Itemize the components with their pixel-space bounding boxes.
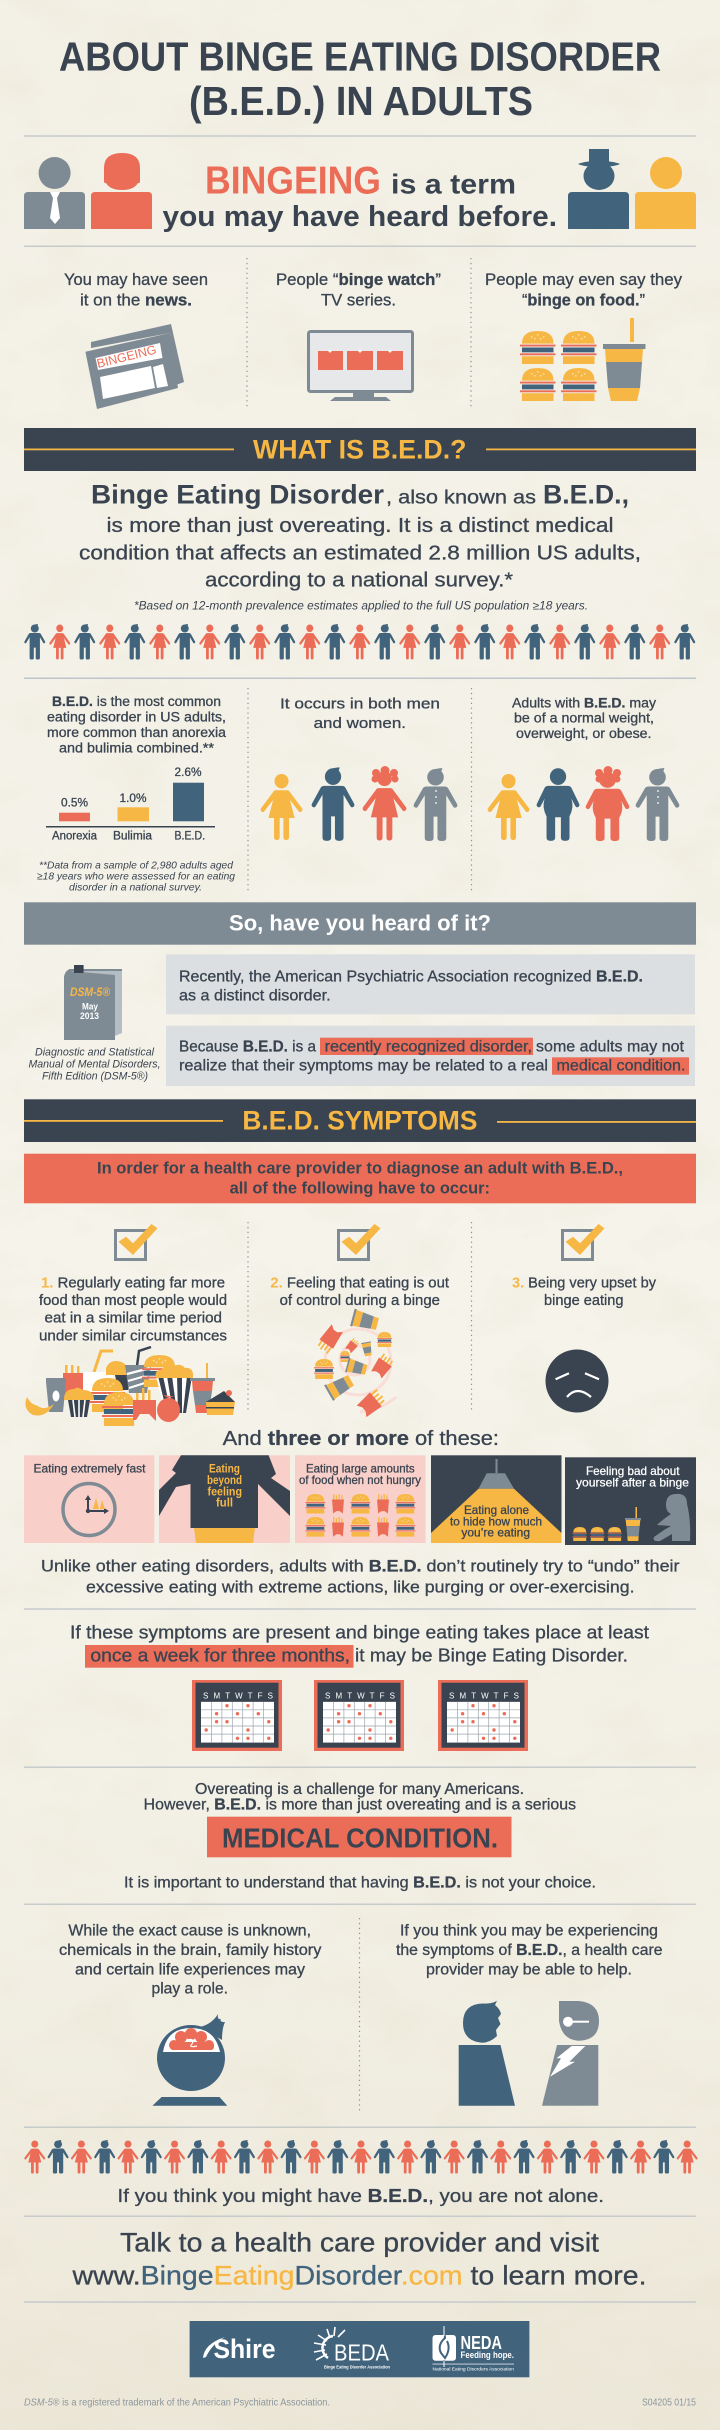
icon: DSM-5 book: 2013 <box>80 1011 99 1021</box>
panel: beyond feeling full: beyond <box>207 1473 242 1487</box>
icon: DSM-5 book: DSM-5® <box>70 985 110 999</box>
panel: eating alone <box>431 1455 562 1543</box>
banner: diagnosis criteria <box>24 1154 696 1203</box>
caption: DSM-5 <box>28 1047 160 1082</box>
bar chart: Anorexia <box>52 830 98 842</box>
panel: seek help: If you think you may be experiencing <box>400 1923 658 1940</box>
logo panel <box>190 2321 529 2377</box>
panel: news: it on the news. <box>80 291 192 310</box>
icon: sad face <box>546 1350 608 1412</box>
bar chart: 2.6% <box>174 765 202 779</box>
footnote: data sample <box>37 860 235 893</box>
panel: causes: play a role. <box>152 1981 228 1998</box>
panel: normal weight, overweight, obese: be of a normal weight, <box>514 711 654 726</box>
logo: NEDA: Feeding hope. <box>460 2350 514 2361</box>
definition text <box>79 479 641 592</box>
definition text: , also known as <box>386 487 536 508</box>
logo: BEDA: Binge Eating Disorder Association <box>324 2364 390 2370</box>
panel: criterion 1: eat in a similar time period <box>44 1311 222 1327</box>
text: medical condition <box>124 1781 596 1892</box>
panel: binge watch: TV series. <box>321 291 396 310</box>
bar chart <box>46 765 215 842</box>
icon: calendar 3: S M T W T F S <box>449 1691 519 1700</box>
text: once a week for three months: it may be Binge Eating Disorder. <box>355 1646 628 1666</box>
section heading: B.E.D. symptoms <box>24 1099 696 1142</box>
footnote: data sample: disorder in a national survey. <box>69 881 202 893</box>
panel: men and women: and women. <box>314 715 406 732</box>
icon: doctor <box>542 2001 599 2106</box>
icon: yellow person <box>635 157 696 229</box>
icon: DSM-5 book <box>64 965 122 1040</box>
icon: pile of food <box>25 1347 235 1426</box>
panel: men and women <box>261 696 457 841</box>
panel: recently recognized: some adults may not <box>536 1038 685 1055</box>
caption: DSM-5: Diagnostic and Statistical <box>35 1047 155 1059</box>
panel: criterion 3: 3. Being very upset by <box>512 1275 657 1291</box>
logo: BEDA <box>314 2327 390 2370</box>
panel: causes <box>59 1923 322 2106</box>
panel: feeling bad: Feeling bad about <box>586 1464 680 1478</box>
icon: checkbox <box>562 1224 604 1260</box>
icon: burgers and drink <box>520 318 646 401</box>
panel: beyond feeling full: Eating <box>209 1462 240 1476</box>
panel: news <box>64 270 208 409</box>
footnote: data sample: **Data from a sample of 2,980 adults aged <box>39 860 234 872</box>
definition text: B.E.D., <box>543 479 629 509</box>
panel: eating when not hungry <box>295 1455 426 1543</box>
panel: recently recognized: recently recognized disorder, <box>325 1038 532 1055</box>
panel: recently recognized: Because B.E.D. is a <box>179 1038 316 1055</box>
icon: television <box>308 332 412 401</box>
panel: causes: chemicals in the brain, family history <box>59 1942 322 1959</box>
bar chart: Bulimia <box>113 830 153 842</box>
panel: eating fast <box>24 1455 154 1543</box>
panel: feeling bad <box>565 1457 696 1545</box>
icon: sad sitting person <box>654 1494 690 1541</box>
icon: woman with hair <box>91 153 152 229</box>
title <box>59 34 661 124</box>
intro text: is a term <box>391 169 516 200</box>
panel: recognized by APA: Recently, the American Psychiatric Association recognized B.E.D. <box>179 968 643 985</box>
icon: newspaper <box>85 324 184 409</box>
text: not alone: If you think you might have B.E.D. , you are not alone. <box>118 2185 604 2206</box>
icon: calendar 2: S M T W T F S <box>325 1691 395 1700</box>
panel: binge watch: People “binge watch” <box>276 270 441 289</box>
caption: DSM-5: Fifth Edition (DSM-5®) <box>42 1070 148 1082</box>
intro text: you may have heard before. <box>162 201 557 233</box>
panel: normal weight, overweight, obese: Adults with B.E.D. may <box>512 695 656 710</box>
panel: seek help <box>396 1923 662 2106</box>
panel: binge on food: “binge on food.” <box>522 291 645 310</box>
icon: head with brain <box>152 2014 227 2106</box>
definition text: is more than just overeating. It is a distinct medical <box>106 514 614 537</box>
panel: recently recognized <box>166 1026 695 1086</box>
people row: 2.8 million adults <box>24 624 695 660</box>
icon: man with hat <box>568 149 629 229</box>
icon: burgers and fries <box>305 1494 415 1537</box>
logo: NEDA: NEDA <box>460 2333 502 2353</box>
title: ABOUT BINGE EATING DISORDER <box>59 34 661 80</box>
panel: criterion 2: of control during a binge <box>280 1293 440 1309</box>
text: once a week for three months <box>70 1623 649 1668</box>
panel: binge on food: People may even say they <box>485 270 682 289</box>
footnote: data sample: ≥18 years who were assessed for an eating <box>37 871 235 883</box>
section heading: have you heard of it: So, have you heard of it? <box>229 911 491 936</box>
section heading: have you heard of it <box>24 902 696 945</box>
intro text: BINGEING <box>205 160 381 203</box>
figures: body sizes <box>488 766 679 841</box>
heading: three or more: And three or more of these: <box>223 1428 499 1450</box>
panel: eating when not hungry: of food when not hungry <box>299 1473 421 1487</box>
panel: recently recognized: realize that their symptoms may be related to a real <box>179 1058 548 1075</box>
panel: seek help: the symptoms of B.E.D., a health care <box>396 1942 662 1959</box>
panel: beyond feeling full <box>159 1455 290 1543</box>
figures: men and women <box>261 766 457 841</box>
definition text: condition that affects an estimated 2.8 million US adults, <box>79 541 641 564</box>
panel: feeling bad: yourself after a binge <box>576 1475 689 1489</box>
panel: most common eating disorder: eating disorder in US adults, <box>47 709 226 724</box>
panel: eating alone: Eating alone <box>464 1503 529 1517</box>
bar chart: 0.5% <box>61 796 88 810</box>
panel: binge on food <box>485 270 682 401</box>
call to action: www.BingeEatingDisorder.com to learn more. <box>71 2260 646 2290</box>
panel: causes: While the exact cause is unknown, <box>68 1923 311 1940</box>
icon: calendar 3 <box>438 1680 528 1751</box>
intro banner: bingeing is a term <box>24 149 696 233</box>
text: no purging <box>41 1558 680 1596</box>
panel: criterion 3: binge eating <box>544 1293 624 1309</box>
panel: criterion 2 <box>270 1224 449 1418</box>
panel: criterion 2: 2. Feeling that eating is out <box>270 1275 449 1291</box>
logo: Shire: Shire <box>214 2334 276 2364</box>
caption: DSM-5: Manual of Mental Disorders, <box>28 1059 160 1071</box>
panel: criterion 1: under similar circumstances <box>39 1329 227 1345</box>
section heading: B.E.D. symptoms: B.E.D. SYMPTOMS <box>242 1105 477 1135</box>
footer note: S04205 01/15 <box>642 2396 696 2408</box>
panel: recently recognized: medical condition. <box>556 1058 686 1075</box>
panel: seek help: provider may be able to help. <box>426 1961 632 1978</box>
panel: beyond feeling full: feeling <box>208 1484 242 1498</box>
text: medical condition: MEDICAL CONDITION. <box>222 1822 498 1853</box>
panel: eating alone: you’re eating <box>461 1526 530 1540</box>
icon: patient <box>459 2001 515 2106</box>
panel: criterion 1: food than most people would <box>39 1293 227 1309</box>
call to action <box>71 2228 646 2290</box>
icon: checkbox <box>116 1224 158 1260</box>
banner: diagnosis criteria: all of the following have to occur: <box>230 1179 490 1198</box>
panel: recognized by APA <box>166 954 695 1014</box>
logo: BEDA: BEDA <box>334 2340 390 2366</box>
section heading: what is B.E.D.: WHAT IS B.E.D.? <box>253 435 466 465</box>
icon: DSM-5 book: May <box>82 1001 98 1011</box>
icon: checkbox <box>338 1224 380 1260</box>
panel: eating alone: to hide how much <box>450 1514 542 1528</box>
text: once a week for three months: If these symptoms are present and binge eating takes place at least <box>70 1623 649 1643</box>
panel: recognized by APA: as a distinct disorder. <box>179 988 331 1005</box>
text: medical condition: Overeating is a challenge for many Americans. <box>195 1781 524 1798</box>
footer note: DSM-5® is a registered trademark of the American Psychiatric Association. <box>24 2396 330 2408</box>
panel: normal weight, overweight, obese <box>488 695 679 841</box>
bar chart: B.E.D. <box>174 830 205 842</box>
panel: eating fast: Eating extremely fast <box>34 1462 146 1476</box>
call to action: Talk to a health care provider and visit <box>120 2228 600 2258</box>
section heading: what is B.E.D. <box>24 428 696 471</box>
panel: men and women: It occurs in both men <box>280 696 440 713</box>
icon: burgers and cup <box>572 1507 641 1541</box>
logo: NEDA <box>432 2326 514 2372</box>
title: (B.E.D.) IN ADULTS <box>189 78 533 124</box>
bar chart: 1.0% <box>120 791 147 805</box>
intro text <box>162 160 557 233</box>
panel: causes: and certain life experiences may <box>75 1961 305 1978</box>
panel: binge watch <box>276 270 441 401</box>
panel: criterion 1: 1. Regularly eating far more <box>41 1275 225 1291</box>
icon: food swirl <box>314 1309 396 1418</box>
text: once a week for three months: once a week for three months, <box>90 1646 350 1666</box>
icon: clock <box>63 1484 115 1536</box>
icon: calendar 1: S M T W T F S <box>203 1691 273 1700</box>
footer note <box>24 2396 696 2408</box>
panel: normal weight, overweight, obese: overweight, or obese. <box>516 726 652 741</box>
icon: calendar 1 <box>192 1680 282 1751</box>
panel: most common eating disorder: more common than anorexia <box>47 725 227 740</box>
panel: most common eating disorder: B.E.D. is the most common <box>52 694 221 709</box>
text: no purging: excessive eating with extreme actions, like purging or over-exercising. <box>86 1578 634 1596</box>
panel: most common eating disorder <box>37 694 235 893</box>
icon: newspaper: BINGEING <box>95 343 158 371</box>
definition text: according to a national survey.* <box>205 569 513 592</box>
text: medical condition: However, B.E.D. is more than just overeating and is a serious <box>144 1796 576 1813</box>
definition text: Binge Eating Disorder <box>91 479 384 509</box>
panel: beyond feeling full: full <box>216 1496 233 1510</box>
icon: man with tie <box>24 157 85 229</box>
banner: diagnosis criteria: In order for a health care provider to diagnose an adult with B.E.D., <box>97 1158 623 1177</box>
panel: news: You may have seen <box>64 270 208 289</box>
text: no purging: Unlike other eating disorders, adults with B.E.D. don’t routinely try to “undo” their <box>41 1558 680 1576</box>
logo: NEDA: National Eating Disorders Association <box>432 2366 514 2372</box>
people row: you are not alone <box>24 2140 698 2174</box>
panel: most common eating disorder: and bulimia combined.** <box>59 740 215 755</box>
panel: criterion 1 <box>25 1224 235 1426</box>
panel: eating when not hungry: Eating large amounts <box>306 1462 415 1476</box>
icon: calendar 2 <box>314 1680 404 1751</box>
footnote: prevalence: *Based on 12-month prevalence estimates applied to the full US population ≥18 years. <box>134 600 588 612</box>
text: medical condition: It is important to understand that having B.E.D. is not your choice. <box>124 1875 596 1892</box>
panel: criterion 3 <box>512 1224 657 1412</box>
